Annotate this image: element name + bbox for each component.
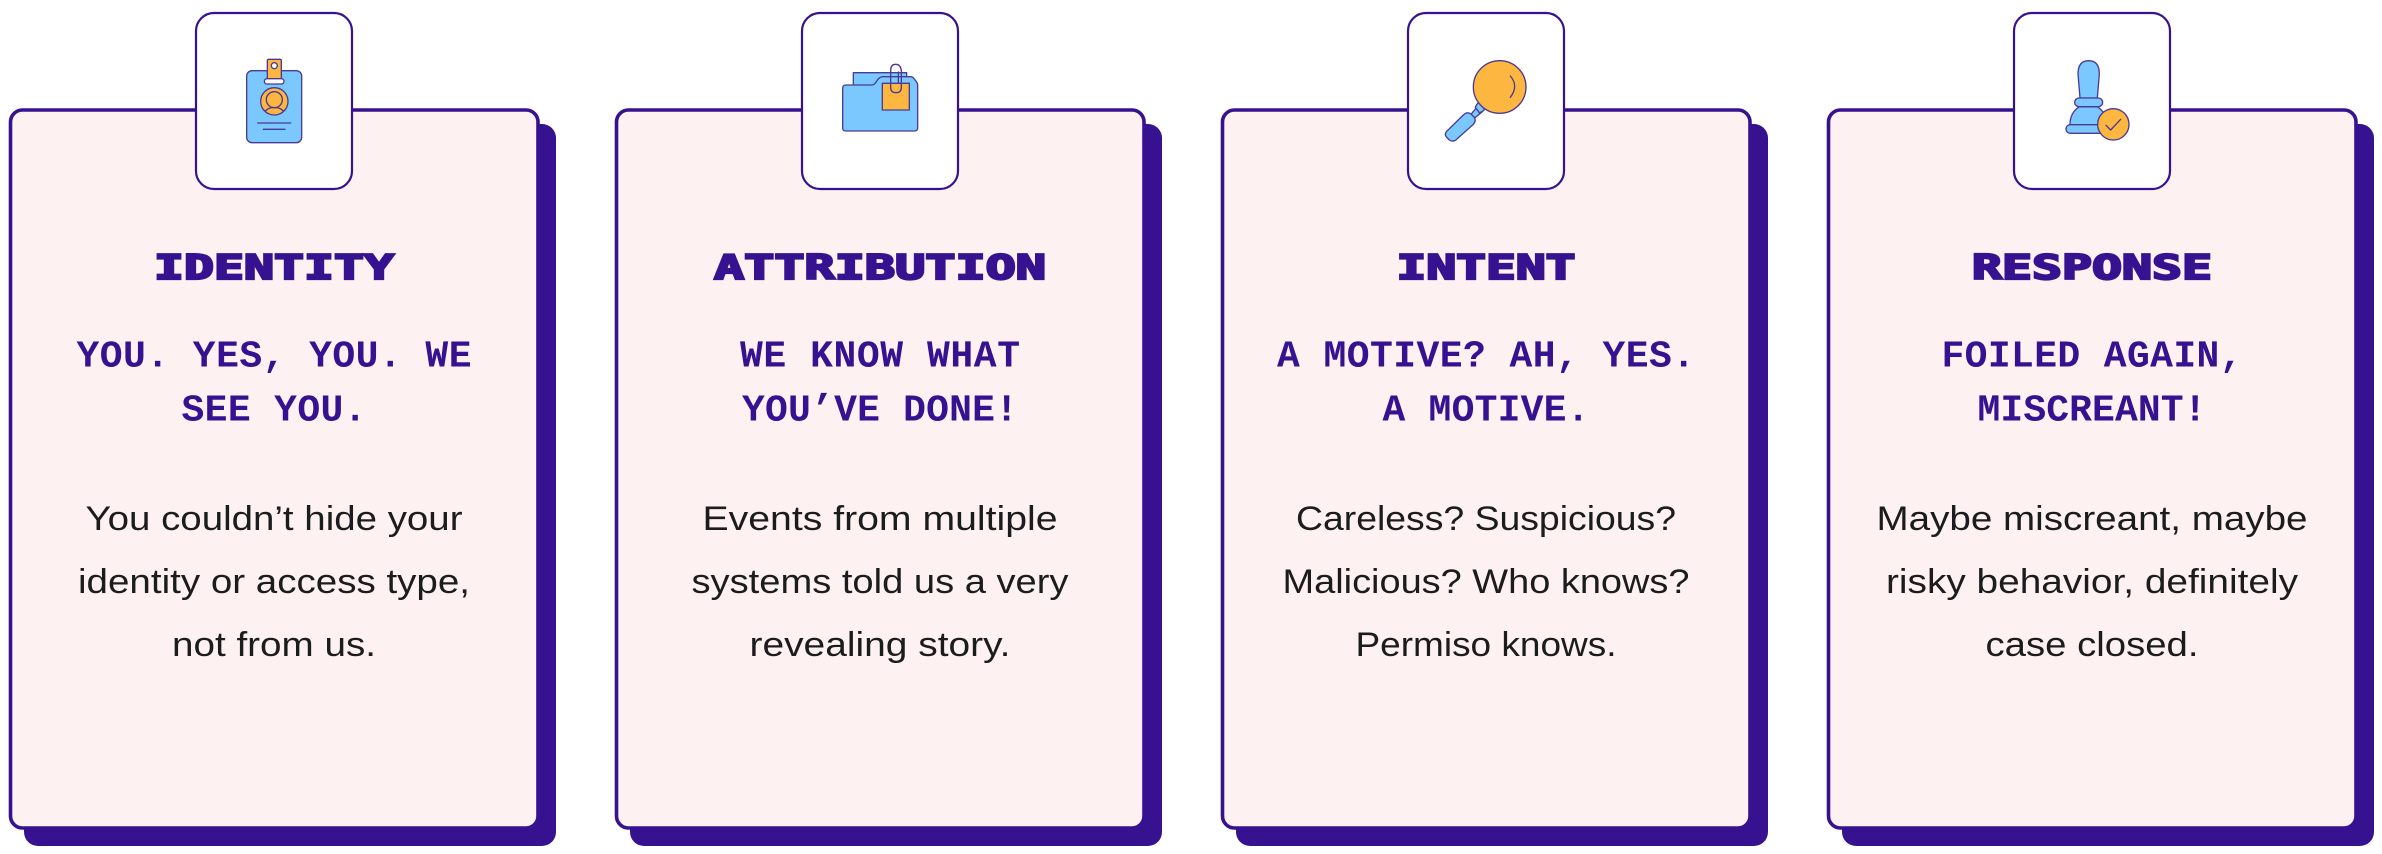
body text [1876,500,2308,664]
icon: id badge [247,59,302,143]
body text [78,500,470,664]
body text: Permiso knows. [1356,626,1616,664]
body text: not from us. [172,626,376,664]
subheading [1277,336,1695,432]
heading: INTENT [1396,248,1576,288]
subheading: WE KNOW WHAT [740,336,1020,378]
body text: Maybe miscreant, maybe [1876,500,2308,538]
body text: systems told us a very [692,563,1068,601]
subheading: A MOTIVE? AH, YES. [1277,336,1695,378]
subheading: YOU. YES, YOU. WE [76,336,472,378]
card shadow [1842,124,2374,846]
body text: Events from multiple [702,500,1058,538]
card body [616,110,1144,828]
card body [1828,110,2356,828]
body text [692,500,1068,664]
body text: identity or access type, [78,563,470,601]
panel: intent [1222,13,1768,846]
subheading: FOILED AGAIN, [1942,336,2242,378]
icon: stamp with check [2066,61,2129,140]
body text [1282,500,1690,664]
icon: magnifying glass [1445,61,1526,141]
card body [10,110,538,828]
card shadow [24,124,556,846]
card shadow [630,124,1162,846]
subheading: MISCREANT! [1978,390,2206,432]
icon: folder with paperclip [843,64,918,131]
body text: revealing story. [750,626,1010,664]
body text: risky behavior, definitely [1886,563,2298,601]
subheading [76,336,472,432]
icon box [1408,13,1564,189]
subheading [740,336,1020,432]
heading: RESPONSE [1972,248,2212,288]
subheading: YOU’VE DONE! [742,390,1018,432]
body text: case closed. [1986,626,2198,664]
body text: Careless? Suspicious? [1296,500,1676,538]
icon box [802,13,958,189]
icon box [2014,13,2170,189]
icon box [196,13,352,189]
panel: attribution [616,13,1162,846]
heading: ATTRIBUTION [714,248,1046,288]
panel: response [1828,13,2374,846]
subheading [1942,336,2242,432]
card shadow [1236,124,1768,846]
body text: Malicious? Who knows? [1282,563,1690,601]
subheading: A MOTIVE. [1382,390,1590,432]
card body [1222,110,1750,828]
body text: You couldn’t hide your [86,500,462,538]
subheading: SEE YOU. [182,390,366,432]
heading: IDENTITY [154,248,395,288]
panel: identity [10,13,556,846]
